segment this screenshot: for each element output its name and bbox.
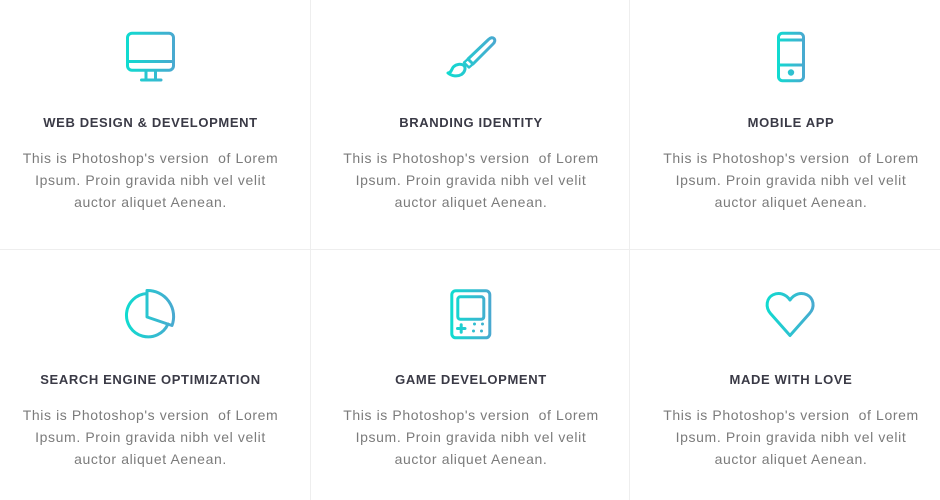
panel: mobile app xyxy=(663,115,919,210)
icon: game console xyxy=(452,291,490,338)
panel: branding identity xyxy=(343,115,599,210)
icon: monitor xyxy=(128,33,174,80)
icon: mobile phone xyxy=(778,33,804,81)
panel: game development xyxy=(343,372,599,467)
panel: made with love xyxy=(663,372,919,467)
panel: made with love: MADE WITH LOVE xyxy=(730,372,852,387)
panel: mobile app: MOBILE APP xyxy=(748,115,834,130)
panel: search engine optimization: This is Photoshop's version of Lorem Ipsum. Proin gravida nibh vel velit auctor aliquet Aenean. xyxy=(23,407,278,467)
panel: game development: This is Photoshop's version of Lorem Ipsum. Proin gravida nibh vel velit auctor aliquet Aenean. xyxy=(343,407,599,467)
panel: search engine optimization xyxy=(23,372,278,467)
panel: game development: GAME DEVELOPMENT xyxy=(395,372,547,387)
panel: branding identity: This is Photoshop's version of Lorem Ipsum. Proin gravida nibh vel velit auctor aliquet Aenean. xyxy=(343,150,599,210)
panel: web design and development: This is Photoshop's version of Lorem Ipsum. Proin gravida nibh vel velit auctor aliquet Aenean. xyxy=(23,150,278,210)
icon: paint brush xyxy=(448,38,495,76)
icon: pie chart xyxy=(126,290,174,337)
panel: web design and development: WEB DESIGN & DEVELOPMENT xyxy=(43,115,258,130)
panel: search engine optimization: SEARCH ENGINE OPTIMIZATION xyxy=(40,372,261,387)
icon: heart xyxy=(767,293,813,336)
panel: web design and development xyxy=(23,115,278,210)
panel: made with love: This is Photoshop's version of Lorem Ipsum. Proin gravida nibh vel velit auctor aliquet Aenean. xyxy=(663,407,919,467)
panel: branding identity: BRANDING IDENTITY xyxy=(399,115,543,130)
panel: mobile app: This is Photoshop's version of Lorem Ipsum. Proin gravida nibh vel velit auctor aliquet Aenean. xyxy=(663,150,919,210)
